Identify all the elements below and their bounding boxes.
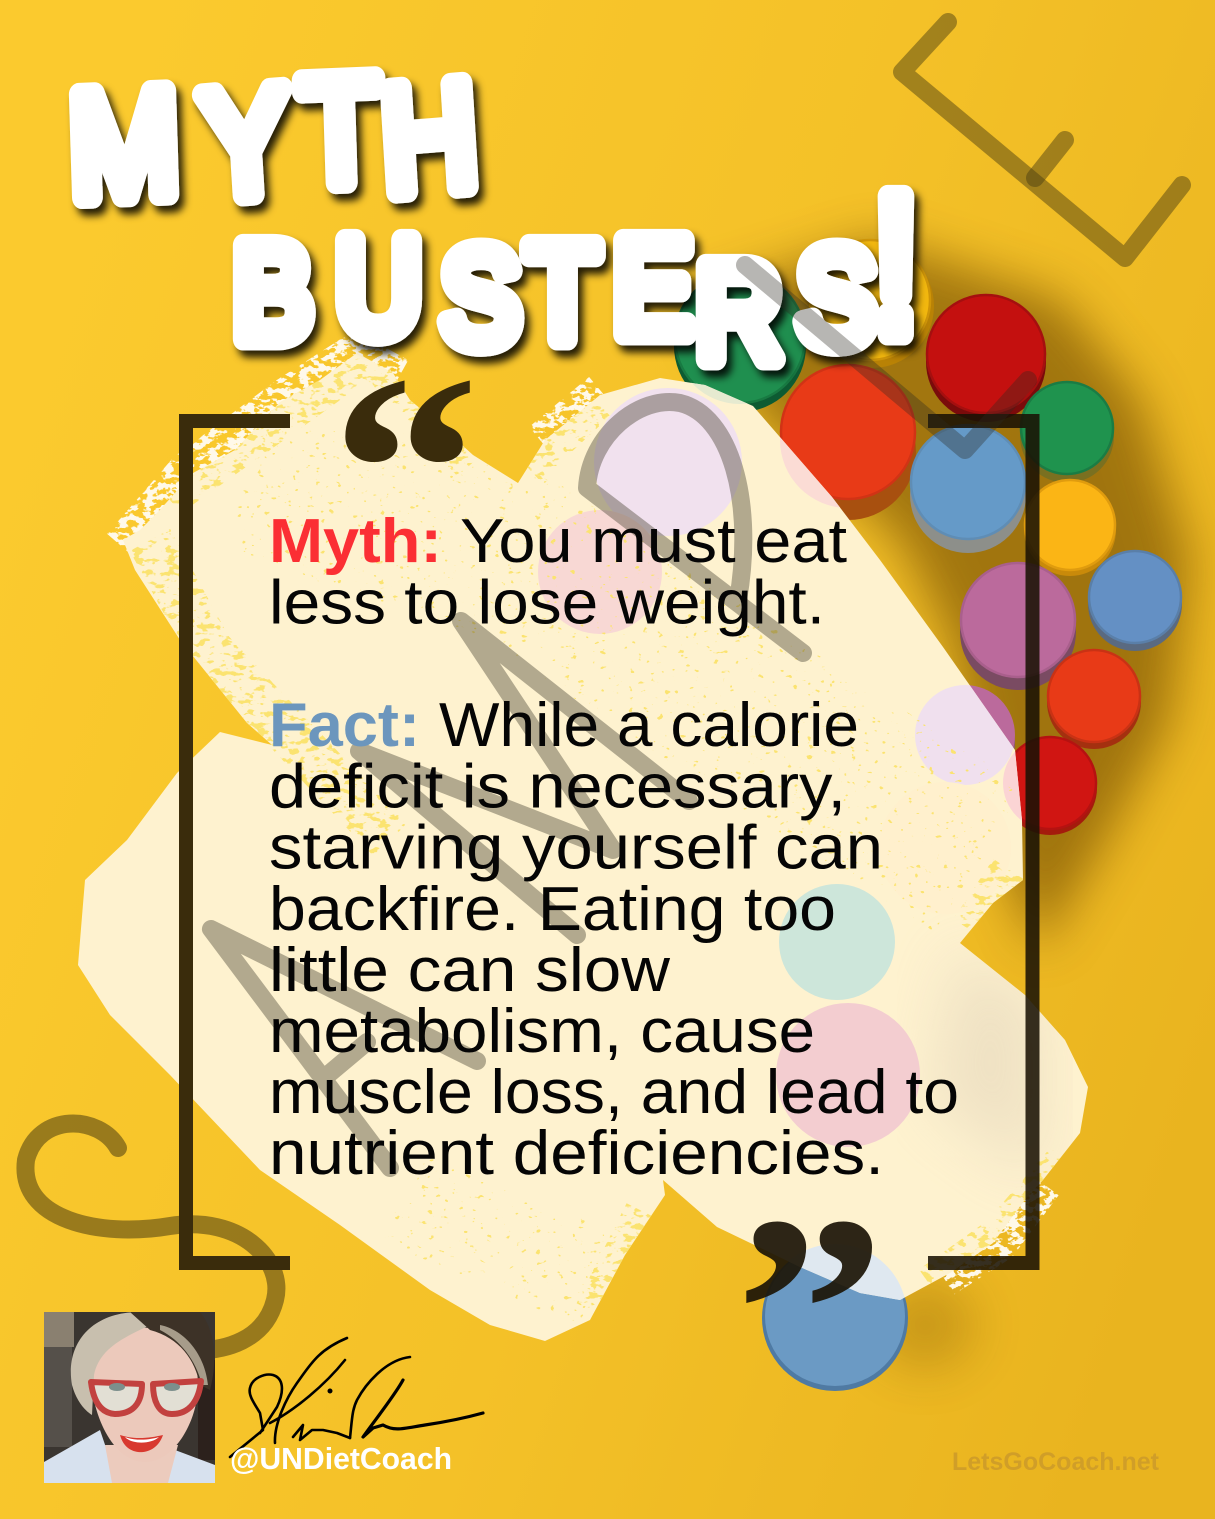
fact statement: Fact: (269, 691, 420, 760)
fact statement: starving yourself can (269, 814, 883, 882)
closing quote mark: ” (735, 1160, 886, 1460)
faded discs seen through the panel (538, 382, 1044, 1300)
eyes (109, 1383, 180, 1391)
title line: BUSTERS!: ! (872, 153, 920, 377)
group: coloured wooden discs (674, 240, 1182, 1391)
disc: purple lower (915, 685, 1015, 792)
decorative line: check over the title (745, 265, 1028, 450)
disc: green right (1020, 382, 1114, 483)
disc: green top (674, 273, 806, 412)
decorative line: letter D (587, 402, 803, 653)
title (67, 45, 920, 389)
disc: red lower (1003, 737, 1097, 835)
myth statement: Myth: (269, 507, 442, 576)
cream fringe outside the brush edges (120, 350, 1045, 1280)
opening quote mark: “ (331, 320, 480, 619)
title line: MYTH: MYTH (67, 45, 481, 230)
decorative line: top right letters (902, 22, 1182, 258)
portrait photo (44, 1312, 215, 1483)
disc: blue bottom (762, 1245, 908, 1391)
disc: orange right (1047, 650, 1141, 749)
face (90, 1327, 198, 1462)
myth statement: less to lose weight. (269, 568, 825, 638)
fact statement: metabolism, cause (269, 997, 815, 1066)
hair (71, 1312, 165, 1415)
disc: red top (926, 295, 1046, 422)
fact statement: little can slow (269, 936, 670, 1005)
disc: orange large (780, 365, 916, 520)
decorative line: squiggle (25, 1124, 276, 1350)
fact statement: backfire. Eating too (269, 875, 836, 944)
brush texture specks (150, 365, 1065, 1310)
title line: BUSTERS!: BUSTERS (233, 212, 876, 389)
cream brush stroke panel (78, 353, 1088, 1341)
decorative line: letter M (359, 621, 689, 935)
handle: @UNDietCoach (230, 1441, 452, 1476)
body copy (269, 507, 959, 1188)
fact statement: deficit is necessary, (269, 752, 846, 822)
disc: yellow top (810, 240, 934, 368)
fact statement: nutrient deficiencies. (269, 1119, 884, 1188)
decorative line: letter A (211, 929, 477, 1168)
disc: blue right (1088, 551, 1182, 651)
website: LetsGoCoach.net (952, 1448, 1160, 1476)
fact statement (269, 691, 959, 1188)
bracket: right (928, 421, 1032, 1263)
mouth (120, 1435, 163, 1452)
disc: blue centre (910, 425, 1026, 553)
myth statement: You must eat (460, 507, 847, 576)
disc: purple (960, 563, 1076, 690)
fact statement: muscle loss, and lead to (269, 1058, 959, 1127)
glasses (91, 1381, 201, 1414)
fact statement: While a calorie (439, 691, 859, 760)
soft shadow around the discs (690, 240, 1190, 1370)
disc: amber (1024, 480, 1116, 576)
shirt (44, 1430, 215, 1483)
myth statement (269, 507, 847, 638)
bracket: left (186, 421, 290, 1263)
signature (230, 1338, 483, 1457)
